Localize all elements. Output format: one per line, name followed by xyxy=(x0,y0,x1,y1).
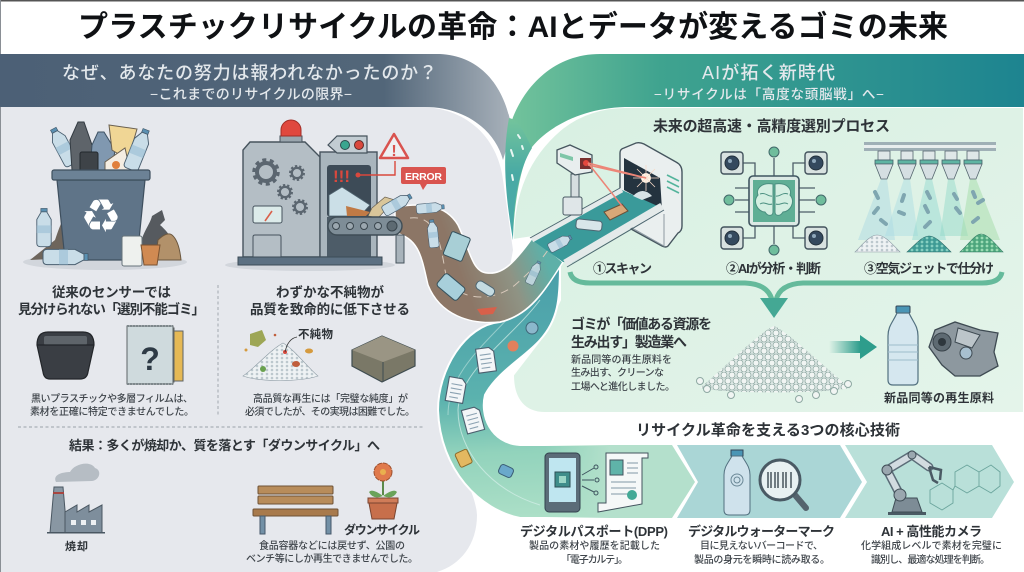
icon: robot arm xyxy=(882,451,941,515)
item: jug xyxy=(436,273,466,301)
icon: recycled machine part xyxy=(929,322,998,376)
icon: air jet nozzles with sorted piles xyxy=(855,142,1003,252)
panel: right AI era xyxy=(513,107,1024,413)
text: manufacturing heading xyxy=(571,316,712,350)
tech 1 text: digital passport: 製品の素材や履歴を記載した xyxy=(529,539,660,552)
tech 2 text: digital watermark: 製品の身元を瞬時に読み取る。 xyxy=(694,553,830,566)
heading: undetectable waste: 見分けられない「選別不能ゴミ」 xyxy=(18,301,205,317)
left header title: なぜ、あなたの努力は報われなかったのか？ xyxy=(62,63,437,83)
heading: undetectable waste: 従来のセンサーでは xyxy=(52,284,172,300)
icon: warning triangle: ! xyxy=(391,143,397,160)
icon: low-quality block xyxy=(352,336,415,382)
text: downcycle caption: 食品容器などには戻せず、公園の xyxy=(259,539,405,552)
tech 1 text: digital passport: デジタルパスポート(DPP) xyxy=(520,524,668,539)
tech 3 text: AI plus camera: 化学組成レベルで素材を完璧に xyxy=(861,539,1002,552)
item: packaging chip xyxy=(604,204,628,220)
tech 1 text: digital passport: 「電子カルテ」。 xyxy=(561,554,628,566)
badge: ERROR: ERROR xyxy=(405,171,442,183)
text: undetectable caption: 黒いプラスチックや多層フィルムは、 xyxy=(31,392,193,405)
item: document xyxy=(476,347,496,373)
text: undetectable caption xyxy=(30,392,194,418)
icon: multilayer film bag: ? xyxy=(140,341,160,377)
item: upright bottle xyxy=(427,219,439,248)
label: downcycle: ダウンサイクル xyxy=(344,522,420,537)
panel: left limits of recycling xyxy=(1,107,513,572)
tech 3 text: AI plus camera xyxy=(861,524,1002,566)
item: plastic bottle on belt xyxy=(547,233,573,253)
heading: result: 結果：多くが焼却か、質を落とす「ダウンサイクル」へ xyxy=(69,438,380,453)
text: manufacturing heading: 生み出す」製造業へ xyxy=(571,334,687,350)
text: manufacturing caption xyxy=(571,353,675,393)
icon: molecular structure xyxy=(930,465,1000,510)
item: green document xyxy=(445,377,467,403)
icon: magnifier with barcode xyxy=(760,460,806,508)
icon: passport document xyxy=(598,453,648,512)
badge: ERROR xyxy=(401,167,446,190)
icon: sorting machine with error xyxy=(225,120,446,271)
icon: overflowing recycling bin xyxy=(23,122,187,270)
divider lines xyxy=(18,285,425,427)
text: manufacturing heading: ゴミが「価値ある資源を xyxy=(571,316,712,332)
label: incineration: 焼却 xyxy=(65,539,88,553)
panel: right header band xyxy=(505,54,1024,240)
item: small bottle in stream xyxy=(526,322,538,334)
label: recycled raw material: 新品同等の再生原料 xyxy=(884,390,994,405)
icon: park bench xyxy=(253,486,338,534)
icon: impure flake pile xyxy=(243,327,334,380)
heading: three core technologies: リサイクル革命を支える3つの核心技術 xyxy=(636,421,900,439)
tech 2 text: digital watermark xyxy=(688,524,835,566)
text: downcycle caption xyxy=(246,539,418,565)
tech 2 text: digital watermark: 目に見えないバーコードで、 xyxy=(700,540,823,552)
item: orange chip xyxy=(508,340,518,352)
arrow: pellets to products xyxy=(829,335,877,359)
icon: incineration factory xyxy=(47,464,105,534)
item: red chip xyxy=(477,307,497,315)
item: document 2 xyxy=(461,406,485,434)
panel: chevron digital watermark xyxy=(677,445,862,518)
right header title: AIが拓く新時代 xyxy=(702,62,835,83)
title: プラスチックリサイクルの革命：AIとデータが変えるゴミの未来 xyxy=(78,10,948,44)
text: purity caption: 高品質な再生には「完璧な純度」が xyxy=(253,392,408,405)
icon: sorting machine with error: !!! xyxy=(333,167,350,186)
item: sparkle flash at scanner xyxy=(633,165,659,200)
tech 1 text: digital passport xyxy=(520,524,668,566)
step label: AI analysis: ②AIが分析・判断 xyxy=(726,261,821,276)
icon: new plastic bottle xyxy=(888,306,918,385)
item: bottle on belt xyxy=(576,219,602,231)
left header subtitle: −これまでのリサイクルの限界− xyxy=(150,86,352,102)
panel: left header band xyxy=(0,54,512,160)
tech 3 text: AI plus camera: 識別し、最適な処理を判断。 xyxy=(871,553,990,566)
icon: pellet pile xyxy=(696,326,852,402)
text: downcycle caption: ベンチ等にしか再生できませんでした。 xyxy=(246,552,418,565)
panel: chevron digital passport xyxy=(545,445,695,518)
item: blue chip xyxy=(498,464,514,478)
panel: chevron AI camera xyxy=(845,445,1014,518)
heading: impurity degrades quality: 品質を致命的に低下させる xyxy=(250,301,410,317)
item: capsule bottle xyxy=(474,279,496,298)
heading: sorting process: 未来の超高速・高精度選別プロセス xyxy=(653,117,890,135)
icon: laser camera xyxy=(557,145,646,215)
item: bottle on stream xyxy=(416,202,445,214)
icon: flower pot xyxy=(368,463,398,519)
text: purity caption xyxy=(245,392,415,418)
text: purity caption: 必須でしたが、その実現は困難でした。 xyxy=(245,405,415,418)
icon: scanner gate xyxy=(620,143,682,247)
item: faded bottle xyxy=(525,260,543,286)
arrow: process down to pellets xyxy=(570,272,1002,318)
icon: recycling symbol: ♻ xyxy=(80,189,122,243)
flow stream: teal lower band xyxy=(438,265,610,518)
icon: multilayer film bag xyxy=(127,326,183,384)
icon: warning triangle xyxy=(380,134,408,160)
heading: impurity degrades quality: わずかな不純物が xyxy=(276,284,384,300)
icon: black plastic tub xyxy=(37,332,94,379)
heading: impurity degrades quality xyxy=(250,284,410,317)
icon: tablet with chip xyxy=(545,453,599,512)
text: manufacturing caption: 生み出す、クリーンな xyxy=(571,366,664,379)
item: rectangular carton xyxy=(443,231,471,262)
heading: undetectable waste xyxy=(18,284,205,317)
item: yellow chip xyxy=(455,449,473,468)
step label: scan: ①スキャン xyxy=(593,261,652,276)
text: undetectable caption: 素材を正確に特定できませんでした。 xyxy=(30,405,194,418)
icon: bottle with fingerprint xyxy=(724,450,750,515)
conveyor to scanner xyxy=(530,165,664,267)
step label: air jet: ③空気ジェットで仕分け xyxy=(864,261,994,276)
text: manufacturing caption: 新品同等の再生原料を xyxy=(571,353,672,366)
icon: AI chip with brain xyxy=(721,147,827,255)
label: impurity: 不純物 xyxy=(298,327,334,341)
text: manufacturing caption: 工場へと進化しました。 xyxy=(571,380,675,393)
right header subtitle: −リサイクルは「高度な頭脳戦」へ− xyxy=(654,86,884,102)
tech 2 text: digital watermark: デジタルウォーターマーク xyxy=(688,524,835,539)
tech 3 text: AI plus camera: AI + 高性能カメラ xyxy=(881,524,982,539)
flow stream: brown S curve xyxy=(395,202,563,323)
